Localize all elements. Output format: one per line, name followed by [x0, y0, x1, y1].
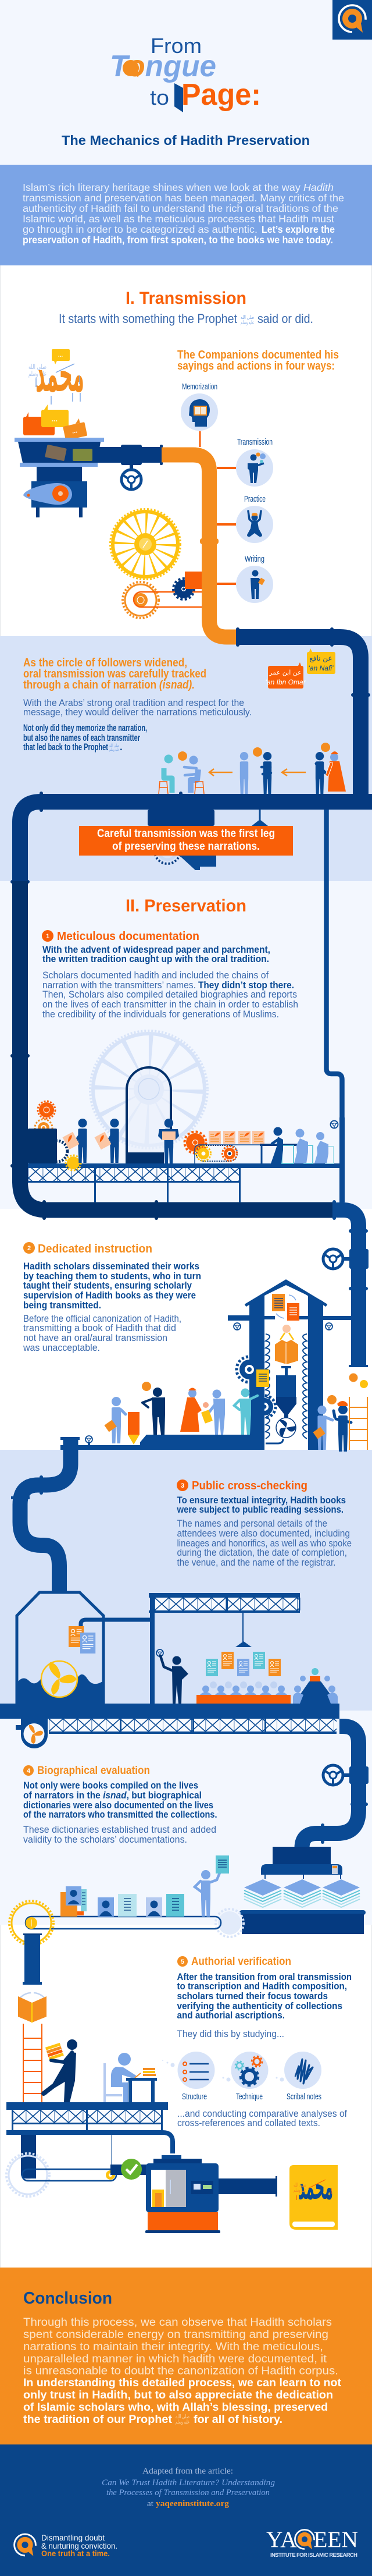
icon: golden book with calligraphy	[289, 2165, 338, 2230]
panel: conclusion: of Islamic scholars who, with Allah’s blessing, preserved	[23, 2401, 328, 2414]
icon: golden book with calligraphy: عليه وسلم	[294, 2188, 306, 2194]
section: meticulous documentation: Then, Scholars also compiled detailed biographies and reports	[42, 989, 297, 1000]
pipe: left vertical and lower return	[10, 881, 369, 1367]
heading: The Companions documented: The Companions documented his	[177, 349, 339, 361]
section: authorial verification: 5	[181, 1958, 184, 1965]
text: As the circle of followers widened: that led back to the Prophet	[23, 741, 108, 753]
icon: calligraphy of Muhammad with speech bubbles: عليه وسلم	[28, 370, 46, 378]
icon: technique	[231, 2052, 269, 2102]
banner: first leg: Careful transmission was the first leg	[97, 828, 275, 840]
heading: I. Transmission: I. Transmission	[126, 289, 246, 308]
section: meticulous documentation: the written tradition caught up with the oral tradition.	[42, 953, 269, 964]
section: meticulous documentation: on the lives of each transmitter in the chain in order to establish	[42, 999, 298, 1010]
footer	[0, 2444, 372, 2576]
section: dedicated instruction: supervision of Hadith books as they were	[23, 1290, 196, 1301]
section: dedicated instruction: 2	[27, 1245, 31, 1252]
text: tagline	[41, 2534, 117, 2558]
machine: hopper press	[15, 438, 104, 517]
section: dedicated instruction: Dedicated instruction	[38, 1243, 152, 1255]
icon: calligraphy of Muhammad with speech bubbles: ...	[58, 352, 63, 359]
section: public cross-checking: the venue, and the name of the registrar.	[177, 1557, 336, 1568]
section: meticulous documentation: narration with the transmitters’ names.	[42, 980, 196, 991]
section: biographical evaluation: dictionaries were also documented on the lives	[23, 1800, 213, 1811]
section: dedicated instruction: Hadith scholars disseminated their works	[23, 1261, 199, 1272]
icon: speech bubbles on hopper	[23, 405, 87, 440]
heading: The Companions documented	[177, 349, 339, 372]
icon: scribal notes: Scribal notes	[287, 2092, 321, 2102]
icon: memorization	[181, 382, 218, 431]
floor: section three with truss and fan	[0, 1704, 339, 1748]
section: public cross-checking: The names and personal details of the	[177, 1518, 327, 1529]
illustration: ladder, book, climbing man, seated scholar	[18, 1993, 157, 2102]
pipe: navy feed	[97, 445, 163, 489]
section: public cross-checking: To ensure textual integrity, Hadith books	[177, 1495, 346, 1506]
pipe: navy upper circuit	[10, 627, 372, 885]
conveyor: biographies	[9, 1855, 244, 1985]
callouts: Arabic chain of narration: ‘an Nafi’	[308, 664, 334, 672]
factory floor and truss	[28, 1117, 345, 1202]
heading: The Companions documented: sayings and actions in four ways:	[177, 360, 335, 372]
gears: yellow, orange, navy	[110, 509, 202, 618]
callouts: Arabic chain of narration: عن نافع	[309, 654, 332, 663]
section: authorial verification: scholars turned their focus towards	[177, 1990, 328, 2002]
text: It starts with something the Prophet: said or did.	[257, 311, 313, 326]
conveyor: verification	[6, 2153, 147, 2197]
people: students and teachers	[104, 1374, 368, 1452]
section: authorial verification: Authorial verification	[191, 1956, 291, 1968]
logo: Yaqeen wordmark: INSTITUTE FOR ISLAMIC RESEARCH	[270, 2552, 357, 2559]
audience on bench	[196, 1681, 291, 1704]
text: tagline: Dismantling doubt	[41, 2534, 105, 2542]
panel: conclusion: for all of history.	[194, 2414, 282, 2426]
connector dots	[162, 2060, 284, 2081]
text: As the circle of followers widened: Not only did they memorize the narration,	[23, 722, 147, 733]
section: dedicated instruction: not have an oral/aural transmission	[23, 1332, 167, 1343]
text: As the circle of followers widened	[23, 657, 252, 753]
text: As the circle of followers widened: As the circle of followers widened,	[23, 657, 187, 669]
people: chain of narrators	[159, 743, 346, 794]
title: to	[150, 86, 169, 109]
section: biographical evaluation: Not only were books compiled on the lives	[23, 1780, 198, 1791]
text: It starts with something the Prophet: صلى الله	[241, 315, 254, 321]
section: dedicated instruction: was unacceptable.	[23, 1342, 100, 1353]
machine: water tank with fan	[17, 1592, 150, 1704]
panel: conclusion: the tradition of our Prophet	[23, 2414, 173, 2426]
section: dedicated instruction: being transmitted.	[23, 1300, 101, 1311]
section: dedicated instruction: Before the official canonization of Hadith,	[23, 1313, 181, 1324]
text: It starts with something the Prophet: عليه وسلم	[241, 320, 254, 326]
icon: transmission: Transmission	[237, 437, 273, 447]
panel: introduction: preservation of Hadith, from first spoken, to the books we have today.	[23, 234, 333, 246]
panel: conclusion: عليه وسلم	[176, 2419, 189, 2425]
section: authorial verification: to transcription and Hadith composition,	[177, 1981, 347, 1992]
people: seated scholars	[260, 1121, 338, 1163]
section: public cross-checking: attendees were also documented, including	[177, 1528, 350, 1539]
panel: conclusion: only trust in Hadith, but to also appreciate the dedication	[23, 2389, 333, 2401]
icon: structure	[178, 2052, 215, 2102]
panel: introduction: Islam’s rich literary heritage shines when we look at the way Hadith	[23, 182, 334, 193]
pipe: S-curve	[11, 1437, 80, 1592]
people: presenter and lifted documents	[160, 1652, 281, 1704]
speaker at podium	[293, 1668, 338, 1704]
icon: memorization: Memorization	[182, 382, 217, 392]
section: authorial verification: ...and conducting comparative analyses of	[177, 2108, 347, 2119]
footer: the Processes of Transmission and Preservation	[106, 2488, 270, 2497]
logo: Yaqeen wordmark: YAQEEN	[266, 2527, 358, 2552]
title: From	[151, 34, 202, 58]
title	[110, 34, 261, 112]
machine: verification press	[145, 2155, 277, 2233]
panel: introduction: authenticity of Hadith fail to understand the rich oral traditions of the	[23, 203, 338, 214]
logo badge: top right	[332, 0, 372, 40]
section: authorial verification: After the transition from oral transmission	[177, 1971, 352, 1982]
section: meticulous documentation: They didn’t stop there.	[198, 980, 294, 991]
icon: writing	[236, 554, 273, 603]
logo: tagline mark	[15, 2534, 35, 2556]
panel: introduction: go through in order to be categorized as authentic.	[23, 223, 257, 235]
panel: introduction: Let’s explore the	[262, 223, 335, 235]
section: dedicated instruction	[23, 1242, 201, 1353]
machine under banner	[148, 810, 268, 870]
text: tagline: & nurturing conviction.	[41, 2542, 117, 2550]
section: authorial verification: They did this by studying...	[177, 2028, 284, 2039]
panel: conclusion: In understanding this detailed process, we can learn to not	[23, 2377, 342, 2389]
text: As the circle of followers widened: .	[120, 741, 123, 753]
people: workers with pages	[63, 1119, 179, 1164]
section: biographical evaluation	[23, 1765, 217, 1845]
section: biographical evaluation: 4	[27, 1768, 31, 1775]
section: authorial verification: verifying the authenticity of collections	[177, 2000, 342, 2011]
panel: conclusion: Conclusion	[23, 2289, 112, 2308]
icon: technique: Technique	[236, 2092, 263, 2102]
icon: practice	[236, 494, 273, 543]
section: dedicated instruction: transmitting a book of Hadith that did	[23, 1322, 176, 1333]
section: biographical evaluation: Biographical evaluation	[37, 1765, 150, 1777]
text: As the circle of followers widened: oral transmission was carefully tracked	[23, 668, 206, 680]
section: authorial verification: cross-references and collated texts.	[177, 2117, 320, 2128]
section: public cross-checking	[177, 1479, 352, 1568]
callouts: Arabic chain of narration: ‘an Ibn Omar	[265, 678, 306, 686]
panel: conclusion: spent considerable energy on transmitting and preserving	[23, 2329, 328, 2341]
section: meticulous documentation: With the advent of widespread paper and parchment,	[42, 944, 270, 955]
machine: house press	[228, 1281, 351, 1450]
panel: conclusion: narrations to maintain their integrity. With the meticulous,	[23, 2341, 323, 2353]
text: As the circle of followers widened: message, they would deliver the narrations meticulously.	[23, 707, 252, 718]
panel: conclusion: Through this process, we can observe that Hadith scholars	[23, 2316, 332, 2329]
footer: Adapted from the article:	[142, 2467, 233, 2476]
text: As the circle of followers widened: through a chain of narration (isnad).	[23, 679, 195, 691]
pipe: right descent to printer	[302, 1726, 369, 1848]
section: meticulous documentation: Scholars documented hadith and included the chains of	[42, 970, 269, 981]
footer: Can We Trust Hadith Literature? Understanding	[102, 2478, 276, 2488]
machine: left gears and block	[28, 1101, 81, 1170]
machine: printer and paper stacks	[239, 1847, 366, 1934]
section: meticulous documentation: the credibility of the individuals for generations of Muslims.	[42, 1009, 279, 1020]
section: dedicated instruction: by teaching them to students, who in turn	[23, 1271, 201, 1282]
section: biographical evaluation: These dictionaries established trust and added	[23, 1824, 216, 1835]
section: authorial verification	[177, 1956, 352, 2128]
truss: gantry with lamp	[149, 1593, 300, 1704]
section: public cross-checking: were subject to public reading sessions.	[177, 1504, 344, 1515]
section: authorial verification: and authorial ascriptions.	[177, 2010, 285, 2021]
conveyor: gears and pages	[185, 1131, 264, 1163]
icon: speech bubbles on hopper: ...	[71, 427, 78, 435]
icon: writing: Writing	[245, 554, 264, 564]
text: As the circle of followers widened: عليه وسلم	[109, 747, 119, 752]
icon: speech bubbles on hopper: ...	[52, 415, 58, 423]
icon: practice: Practice	[244, 494, 266, 504]
icon: calligraphy of Muhammad with speech bubbles: محمد	[35, 344, 84, 403]
section: meticulous documentation: Meticulous documentation	[57, 930, 199, 943]
section: biographical evaluation: of narrators in the isnad, but biographical	[23, 1790, 202, 1801]
section: public cross-checking: lineages and honorifics, as well as who spoke	[177, 1538, 352, 1549]
banner: first leg: of preserving these narrations.	[112, 840, 260, 853]
section: meticulous documentation: 1	[46, 933, 49, 940]
section: biographical evaluation: of the narrators who transmitted the collections.	[23, 1809, 217, 1820]
branches from orange pipe	[199, 431, 236, 585]
heading: II. Preservation: II. Preservation	[126, 896, 246, 916]
icon: scribal notes	[284, 2052, 321, 2102]
panel: introduction: transmission and preservation has been managed. Many critics of the	[23, 192, 344, 204]
title: Tongue	[110, 49, 216, 83]
text: tagline: One truth at a time.	[41, 2549, 110, 2558]
machine base and floor	[60, 1397, 264, 1450]
panel: conclusion: is unreasonable to doubt the canonization of Hadith corpus.	[23, 2365, 338, 2377]
icon: calligraphy of Muhammad with speech bubbles	[28, 344, 84, 405]
text: As the circle of followers widened: but also the names of each transmitter	[23, 732, 140, 743]
banner: first leg	[79, 826, 293, 856]
panel: introduction	[0, 165, 372, 265]
section: biographical evaluation: validity to the scholars’ documentations.	[23, 1834, 187, 1845]
section: public cross-checking: during the dictation, the date of completion,	[177, 1547, 347, 1558]
icon: calligraphy of Muhammad with speech bubbles: صلى الله	[28, 363, 46, 371]
section: public cross-checking: Public cross-checking	[192, 1479, 307, 1492]
callouts: Arabic chain of narration: عن ابن عمر	[269, 669, 302, 676]
floor: authorial section with truss	[6, 2102, 173, 2168]
title: Page:	[181, 78, 261, 112]
panel: introduction: Islamic world, as well as the meticulous processes that Hadith must	[23, 213, 334, 225]
footer: yaqeeninstitute.org	[156, 2499, 229, 2508]
footer: at	[147, 2499, 154, 2508]
text: It starts with something the Prophet: It starts with something the Prophet	[59, 311, 237, 326]
icon: structure: Structure	[182, 2092, 207, 2102]
subtitle: The Mechanics of Hadith Preservation	[62, 133, 310, 148]
callouts: Arabic chain of narration	[265, 648, 335, 689]
gear: large pale wheel with arch	[90, 1031, 208, 1164]
panel: conclusion: unparalleled manner in which hadith were documented, it	[23, 2353, 327, 2365]
icon: golden book with calligraphy: صلى الله	[294, 2183, 306, 2188]
pipe: orange	[162, 455, 238, 637]
section: dedicated instruction: taught their students, ensuring scholarly	[23, 1280, 192, 1291]
text: As the circle of followers widened: صلى الله	[109, 743, 119, 748]
thin pipe: right	[327, 810, 342, 1202]
section: public cross-checking: 3	[181, 1482, 184, 1489]
icon: golden book with calligraphy: محمد	[298, 2165, 333, 2208]
panel: conclusion	[0, 2268, 372, 2445]
section: meticulous documentation	[42, 930, 298, 1020]
panel: conclusion: صلى الله	[176, 2414, 189, 2420]
icon: transmission	[236, 437, 273, 487]
text: As the circle of followers widened: With the Arabs’ strong oral tradition and respect for the	[23, 697, 244, 708]
